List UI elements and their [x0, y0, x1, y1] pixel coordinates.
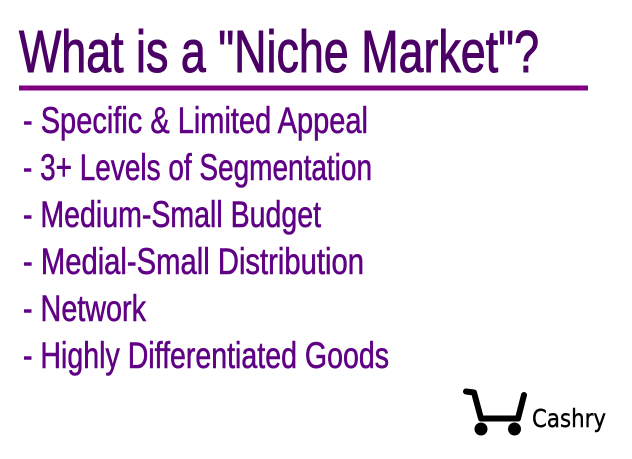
list item: network: - Network	[23, 288, 146, 329]
title underline	[19, 86, 588, 90]
Cashry logo	[466, 392, 606, 436]
list item: distribution: - Medial-Small Distribution	[23, 241, 364, 282]
list item: segmentation: - 3+ Levels of Segmentation	[23, 147, 372, 188]
list item: budget: - Medium-Small Budget	[23, 194, 322, 235]
brand name: Cashry	[532, 404, 606, 433]
icon: shopping cart	[466, 392, 524, 436]
list item: appeal: - Specific & Limited Appeal	[23, 100, 368, 141]
list of niche market traits	[23, 100, 389, 376]
list item: goods: - Highly Differentiated Goods	[23, 335, 389, 376]
